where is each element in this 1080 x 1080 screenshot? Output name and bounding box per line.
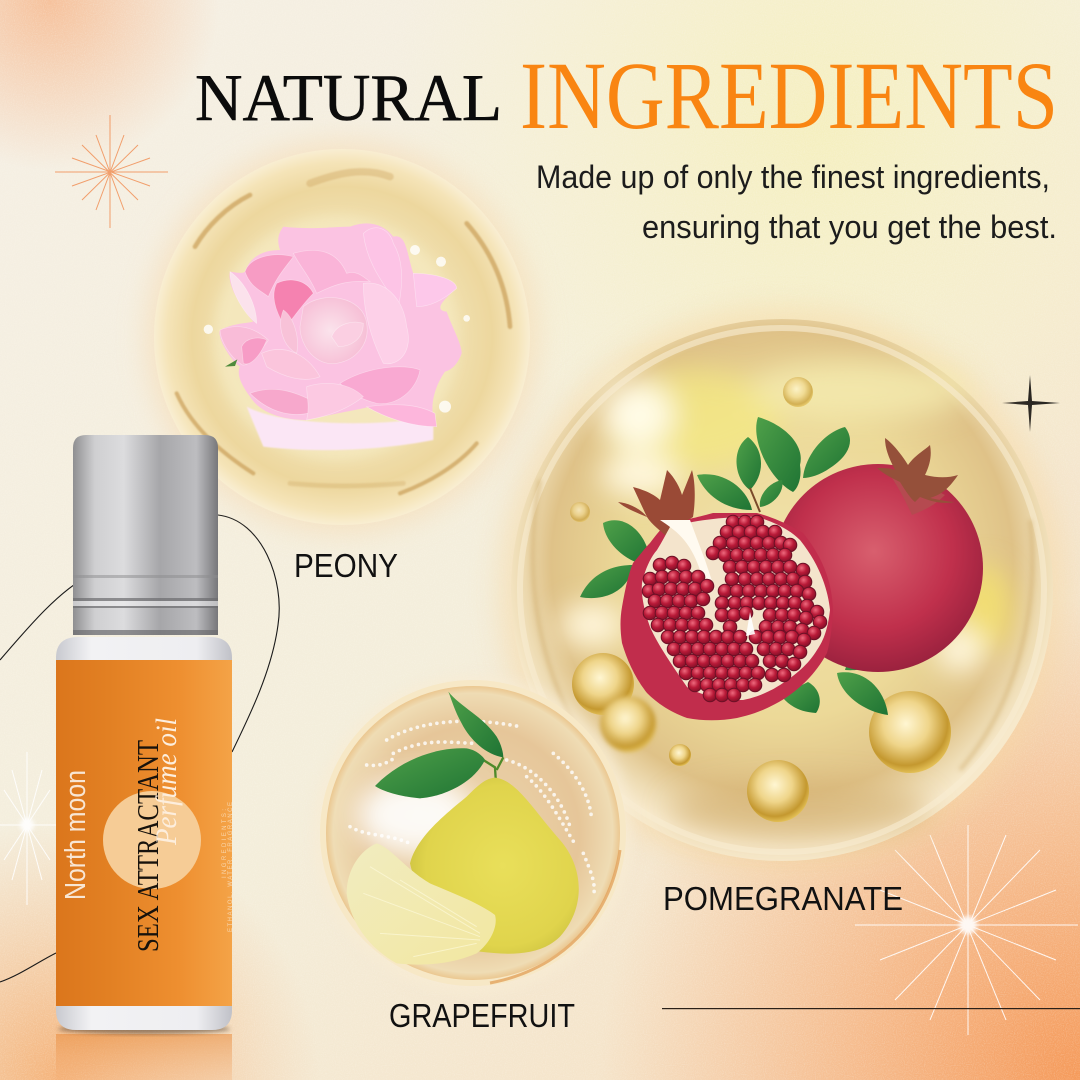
ingredients small text [222, 802, 234, 932]
sparkle: dark four-point star [1002, 375, 1060, 432]
white bubbles [204, 245, 470, 413]
sparkle: orange burst top left [55, 115, 168, 228]
title word: natural: NATURAL [195, 61, 502, 135]
sparkle: large white burst bottom right [855, 825, 1078, 1035]
perfume oil script: Perfume oil [150, 718, 183, 846]
sparkle: white burst left [0, 752, 58, 905]
cut half [620, 513, 833, 720]
decorative curved line [0, 515, 279, 982]
label: pomegranate: POMEGRANATE [663, 880, 903, 917]
icon: golden oil beads [570, 377, 951, 822]
icon: pomegranate [580, 417, 983, 720]
leaves [580, 417, 893, 715]
bubble: peony [146, 141, 538, 533]
bottle reflection [56, 1034, 232, 1080]
ingredients small text: ETHANOL, WATER, FRAGRANCE [228, 802, 234, 932]
seeds [642, 515, 827, 702]
brand name: North moon [60, 770, 92, 900]
icon: grapefruit [347, 692, 579, 965]
subtitle text [536, 159, 1057, 245]
liquid ring strokes [177, 172, 510, 493]
fizz dots [350, 721, 594, 897]
subtitle text: Made up of only the finest ingredients, [536, 159, 1050, 195]
label circle [103, 791, 201, 889]
bottle label [56, 660, 232, 1006]
bottle body [56, 637, 232, 1030]
bubble: grapefruit [313, 675, 633, 995]
divider line [662, 1008, 1080, 1009]
icon: peony flower [219, 223, 462, 450]
bottle cap [73, 435, 218, 635]
bubble: pomegranate [499, 307, 1065, 873]
label: grapefruit: GRAPEFRUIT [389, 997, 575, 1034]
title [195, 42, 1058, 149]
whole fruit [773, 464, 983, 672]
ingredients small text: INGREDIENTS: [222, 808, 228, 878]
product name: SEX ATTRACTANT [130, 740, 165, 952]
subtitle text: ensuring that you get the best. [642, 209, 1057, 245]
product bottle [56, 435, 234, 1080]
label: peony: PEONY [294, 547, 398, 584]
